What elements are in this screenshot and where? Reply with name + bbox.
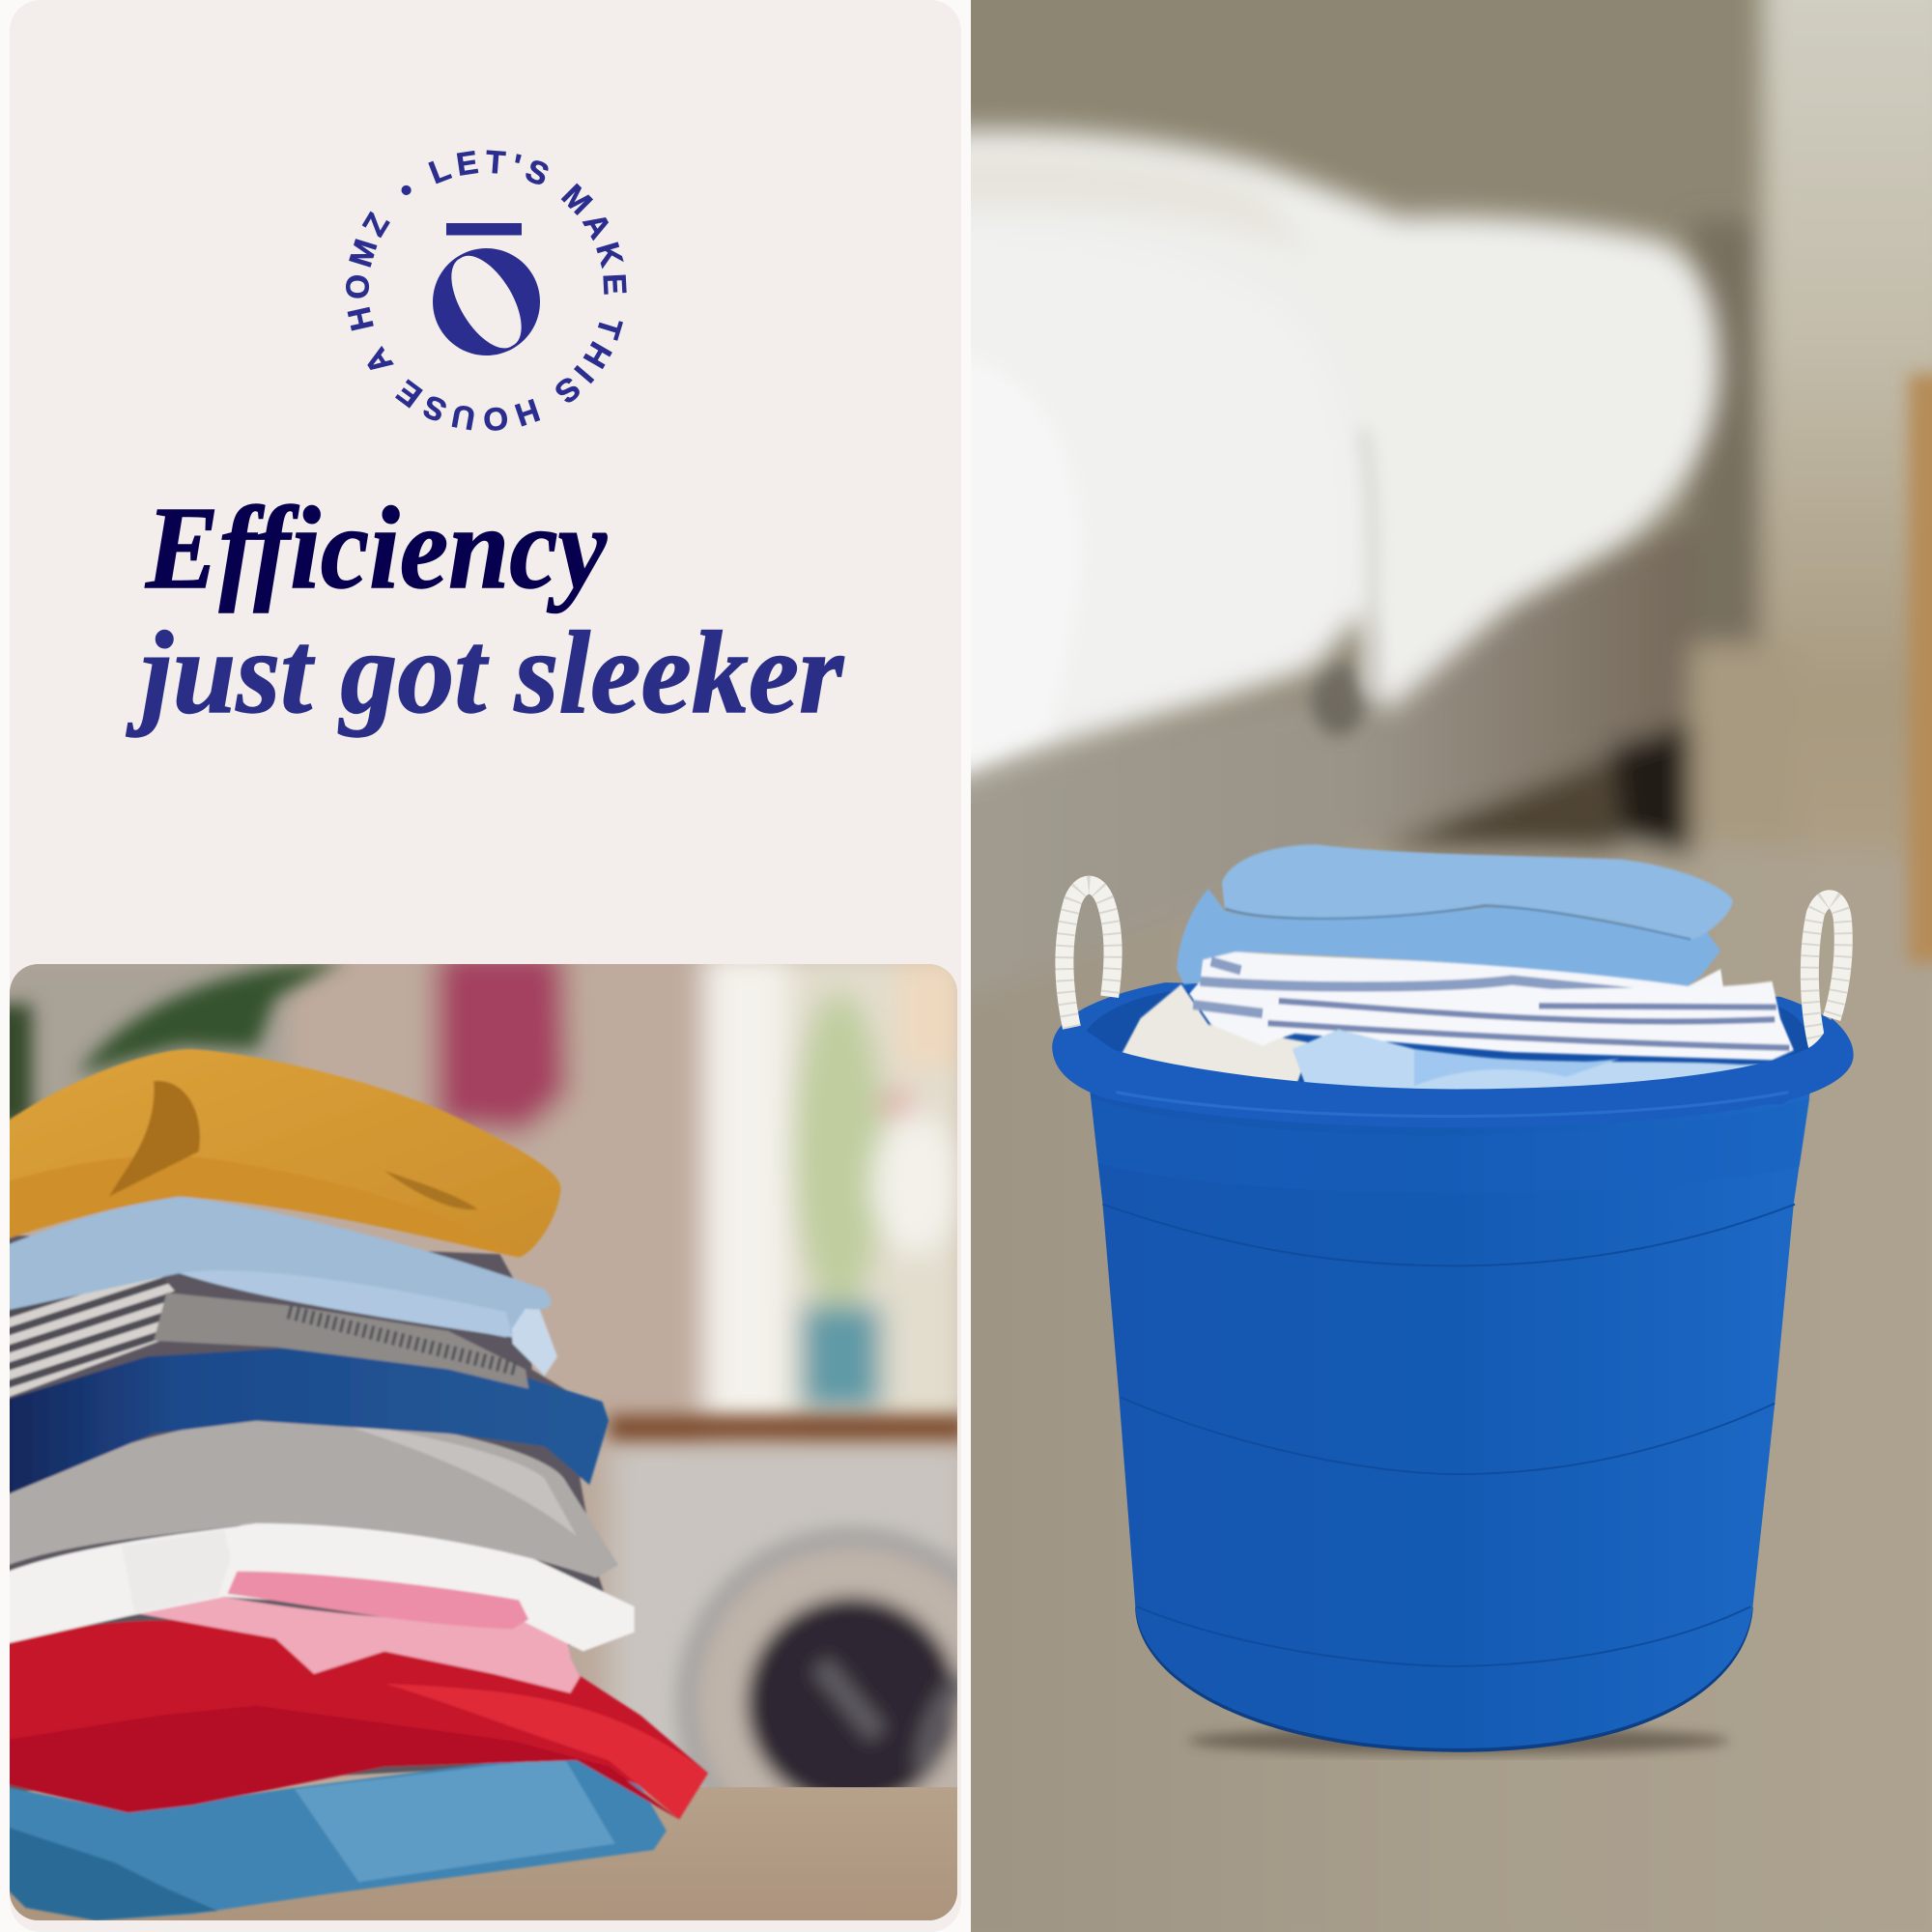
- second towel: [1177, 889, 1720, 986]
- photo background: blurred bedroom: [934, 0, 1932, 1932]
- clothes layers: [0, 1049, 708, 1920]
- bed duvet: [934, 130, 1719, 787]
- rim highlight: [1116, 1093, 1788, 1117]
- light blue shirt: [1293, 1028, 1762, 1090]
- photo: folded clothes stack: [0, 953, 1029, 1932]
- tub and contents: [1052, 844, 1854, 1752]
- white cloth: [1122, 984, 1311, 1089]
- heading: just got sleeker: just got sleeker: [127, 608, 844, 738]
- tub back rim: [1052, 982, 1854, 1104]
- folded laundry in tub: [1122, 844, 1794, 1095]
- tub body: [1090, 1093, 1810, 1752]
- tub interior: [1086, 991, 1808, 1082]
- tub shadow on carpet: [1188, 1727, 1729, 1754]
- top towel: [1222, 844, 1733, 939]
- striped cloth front: [1263, 982, 1794, 1060]
- logo mark: o with macron: [433, 223, 540, 355]
- panel: left cream card: [10, 0, 961, 1932]
- tub front rim: [1052, 1018, 1854, 1127]
- logo ring text: • LET'S MAKE THIS HOUSE A HOMZ: [346, 150, 627, 431]
- logo: circular badge: [346, 150, 627, 431]
- striped cloth back: [1189, 952, 1780, 1046]
- photo background: laundry room: [0, 953, 968, 1799]
- table top: [0, 1787, 968, 1932]
- washing machine door and shelf: [10, 964, 957, 1787]
- photo: blue laundry tub in bedroom: [934, 0, 1932, 1932]
- heading: Efficiency: Efficiency: [145, 483, 608, 613]
- white rope handles: [1065, 885, 1843, 1049]
